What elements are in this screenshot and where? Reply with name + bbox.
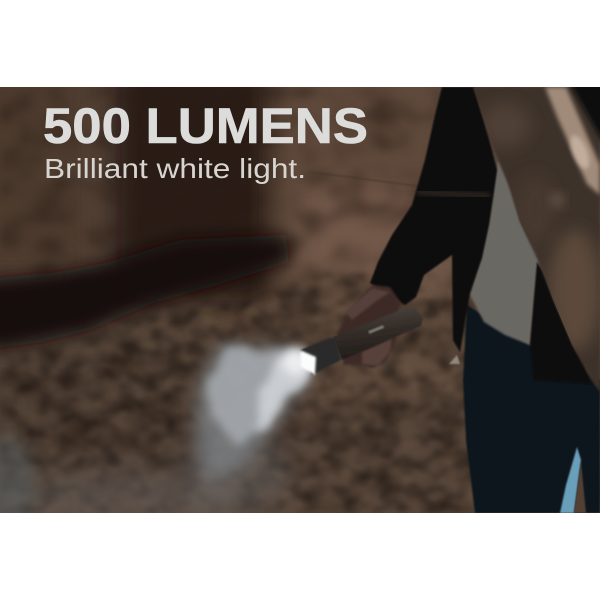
dark shadow at base of the wall [0,235,290,350]
cool haze on the ground [16,462,228,513]
foreground tree trunk [473,80,600,392]
subheading: Brilliant white light. [44,153,306,184]
wall mottling [0,87,600,317]
person: grey t-shirt [470,160,540,345]
flashlight [300,305,423,375]
thin wire across the background [310,172,418,186]
flashlight logo [368,325,384,334]
ground speckle [0,270,474,513]
person: black jacket and sleeve [370,87,497,352]
flashlight lens glow [300,350,316,375]
photo infographic canvas [0,87,600,513]
ground gap between legs [574,462,586,513]
person: trousers [463,305,600,513]
sunlit streak [545,87,600,195]
person: blue jeans highlight [560,447,581,513]
person: jacket right panel [530,262,592,384]
background: blurred rock wall and ground [0,60,600,530]
photograph band [0,60,600,530]
blurred band crossing the jacket [417,192,490,196]
flashlight head [300,338,341,375]
jacket zip pull [449,355,460,364]
light beam on ground [195,345,312,480]
hand holding the flashlight [337,285,401,368]
heading: 500 LUMENS [43,98,368,154]
dark sky patch [570,87,600,142]
